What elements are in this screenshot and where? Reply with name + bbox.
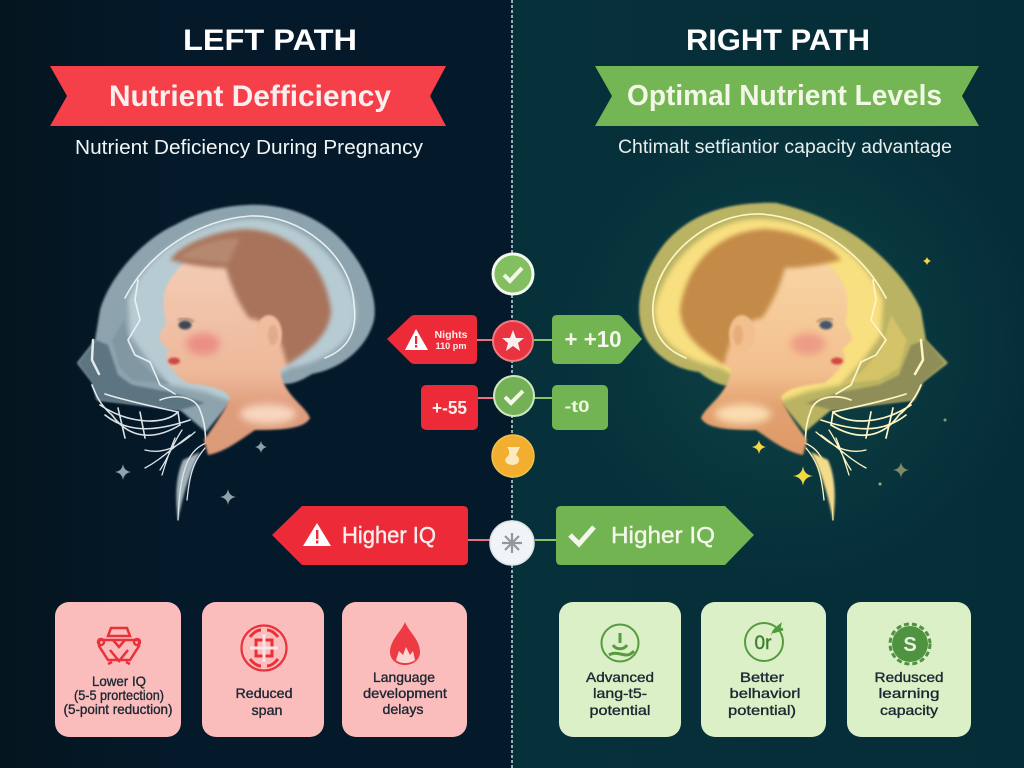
card: advanced potential: potential [590,702,650,718]
outcome arrow: right [556,506,754,565]
card: reduced learning [847,602,971,737]
card: reduced span: Reduced [236,685,292,701]
card: language delays [342,602,467,737]
card: better behavior: potential) [728,702,796,718]
tag: green value: -t0 [564,397,590,416]
background: right panel [512,0,1024,768]
timeline node: yellow [492,435,534,477]
card: reduced learning: Redusced [874,669,944,685]
right subtitle: Chtimalt setfiantior capacity advantage [618,137,952,158]
card: language delays: delays [382,701,424,717]
background: left panel [0,0,512,768]
center dashed divider [511,0,513,768]
illustration: child head with dim brain network [77,205,375,520]
icon: green badge: S [903,634,917,656]
ear [729,315,755,353]
banner: nutrient deficiency [50,66,446,126]
illustration: child head with glowing brain network [639,203,948,520]
card: reduced learning: learning [878,685,940,701]
card: lower IQ [55,602,181,737]
card: lower IQ: (5-5 prortection) [74,687,164,703]
tag: red night value [387,315,477,364]
outcome arrow: left [272,506,468,565]
sparkles: left [115,441,267,505]
outcome arrow: right: Higher IQ [611,522,715,548]
banner: nutrient deficiency: Nutrient Defficiency [109,80,391,113]
child skin [701,238,852,455]
timeline node: green check [493,254,533,294]
right path heading: RIGHT PATH [686,24,870,57]
icon: green ring with leaf: 0r [755,633,772,654]
icon: red car face [98,628,140,664]
card: better behavior: belhaviorl [730,685,800,701]
timeline connectors [468,340,556,540]
inner light halo [655,219,883,402]
card: language delays: Language [373,669,435,685]
nerve lines [653,214,923,520]
icon: green hand and sprout [602,624,638,662]
timeline node: white [490,521,534,565]
eye [178,318,194,330]
card: advanced potential: Advanced [586,669,654,685]
tag: red value: +-55 [432,398,467,418]
inner light halo [128,219,356,402]
outer halo [77,205,375,432]
card: reduced learning: capacity [880,702,938,718]
icon: red globe [242,626,286,670]
tag: green value [552,385,608,430]
ear [256,315,282,353]
card: reduced span [202,602,324,737]
ghost face mid layer [841,315,907,384]
mouth [831,358,843,364]
tag: red night value: Nights [434,330,468,341]
card: better behavior [701,602,826,737]
timeline node: green check two [494,376,534,416]
shoulder highlight [240,404,296,424]
card: reduced span: span [252,702,282,718]
card: better behavior: Better [740,669,784,685]
left subtitle: Nutrient Deficiency During Pregnancy [75,137,423,159]
ghost face mid layer [112,320,170,384]
shoulder highlight [715,404,771,424]
child hair [680,229,841,365]
banner: optimal nutrient levels: Optimal Nutrient Levels [627,80,942,112]
card: lower IQ: (5-point reduction) [64,701,172,717]
sparkles: right [752,257,946,486]
banner: optimal nutrient levels [595,66,979,126]
tag: green plus ten: + +10 [564,326,622,352]
eye [817,318,833,330]
child hair [170,229,331,365]
tag: red night value: 110 pm [436,341,466,352]
left path heading: LEFT PATH [183,24,357,57]
timeline node: red star [493,321,533,361]
child skin [159,238,310,455]
icon: red flame [390,622,420,665]
ghost face dark layer [806,340,945,410]
card: language delays: development [363,685,447,701]
cheek [791,333,825,355]
tag: green plus ten [552,315,642,364]
card: advanced potential [559,602,681,737]
card: advanced potential: lang-t5- [593,685,647,701]
mouth [168,358,180,364]
outcome arrow: left: Higher IQ [342,522,436,548]
cheek [186,333,220,355]
card: lower IQ: Lower IQ [92,673,146,689]
outer halo [639,203,948,432]
nerve lines [92,216,355,520]
tag: red value [421,385,478,430]
ghost face dark layer [78,340,205,410]
